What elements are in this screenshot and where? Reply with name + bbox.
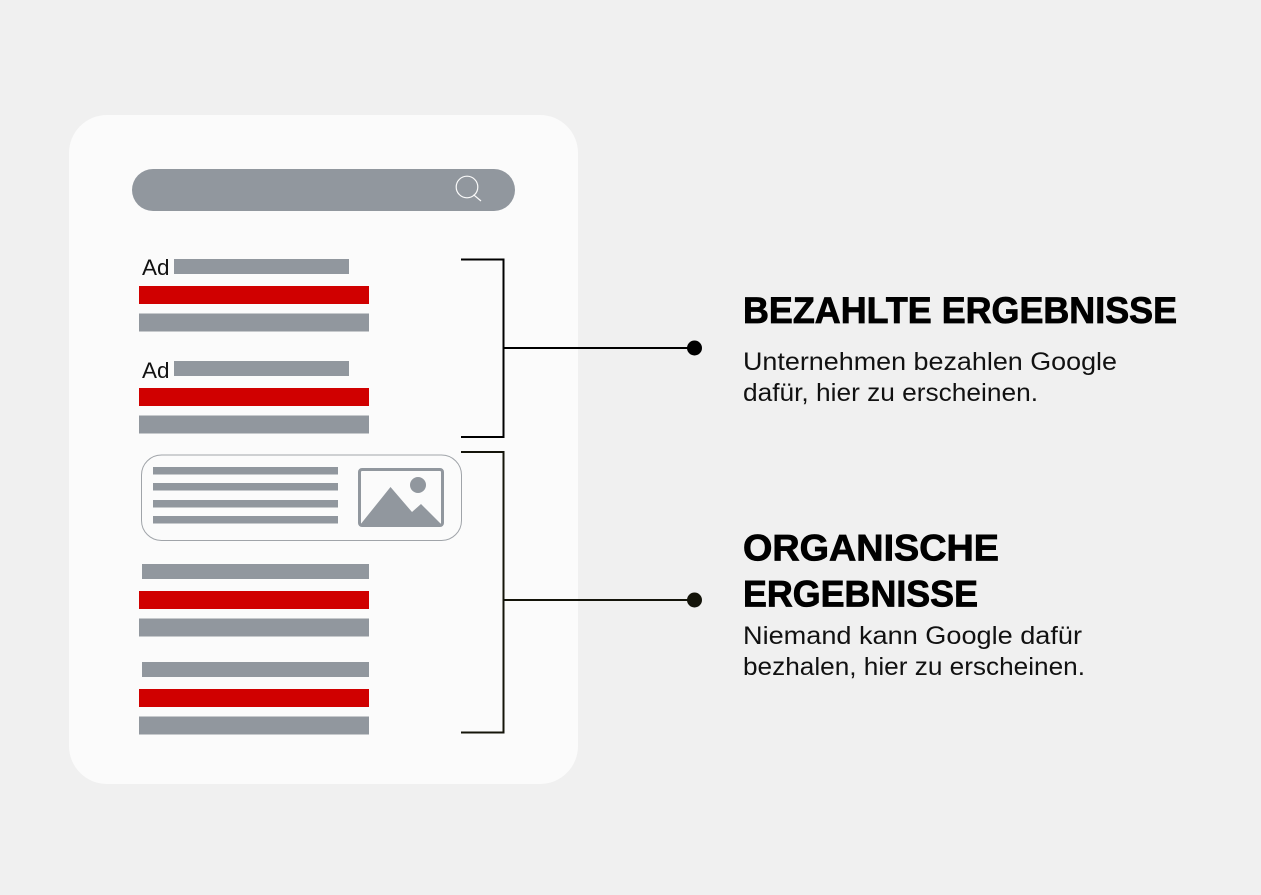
description: organic results: bezhalen, hier zu erscheinen. [743, 653, 1085, 681]
description: paid results [743, 348, 1117, 407]
description: organic results [743, 622, 1085, 681]
paid result 2 [139, 358, 369, 434]
description: paid results: dafür, hier zu erscheinen. [743, 379, 1038, 407]
description: paid results: Unternehmen bezahlen Google [743, 348, 1117, 376]
heading: organic results: ERGEBNISSE [743, 574, 978, 614]
paid result 1 [139, 255, 369, 332]
description: organic results: Niemand kann Google dafür [743, 622, 1082, 650]
text block: organic results [743, 528, 1085, 681]
heading: organic results [743, 528, 999, 614]
snippet text lines [153, 467, 338, 524]
icon: image placeholder [360, 470, 442, 526]
bracket: paid results connector [461, 260, 702, 437]
heading: organic results: ORGANISCHE [743, 528, 999, 568]
text block: paid results [743, 290, 1177, 407]
heading: paid results: BEZAHLTE ERGEBNISSE [743, 290, 1177, 331]
panel: search results page [69, 115, 578, 784]
ad label: Ad [142, 358, 170, 383]
organic result 1 [139, 564, 369, 636]
organic result 2 [139, 662, 369, 734]
ad label: Ad [142, 255, 170, 280]
bracket: organic results connector [461, 452, 702, 732]
search bar [132, 169, 515, 211]
featured snippet card [142, 455, 462, 540]
icon: magnifying glass [456, 176, 481, 201]
